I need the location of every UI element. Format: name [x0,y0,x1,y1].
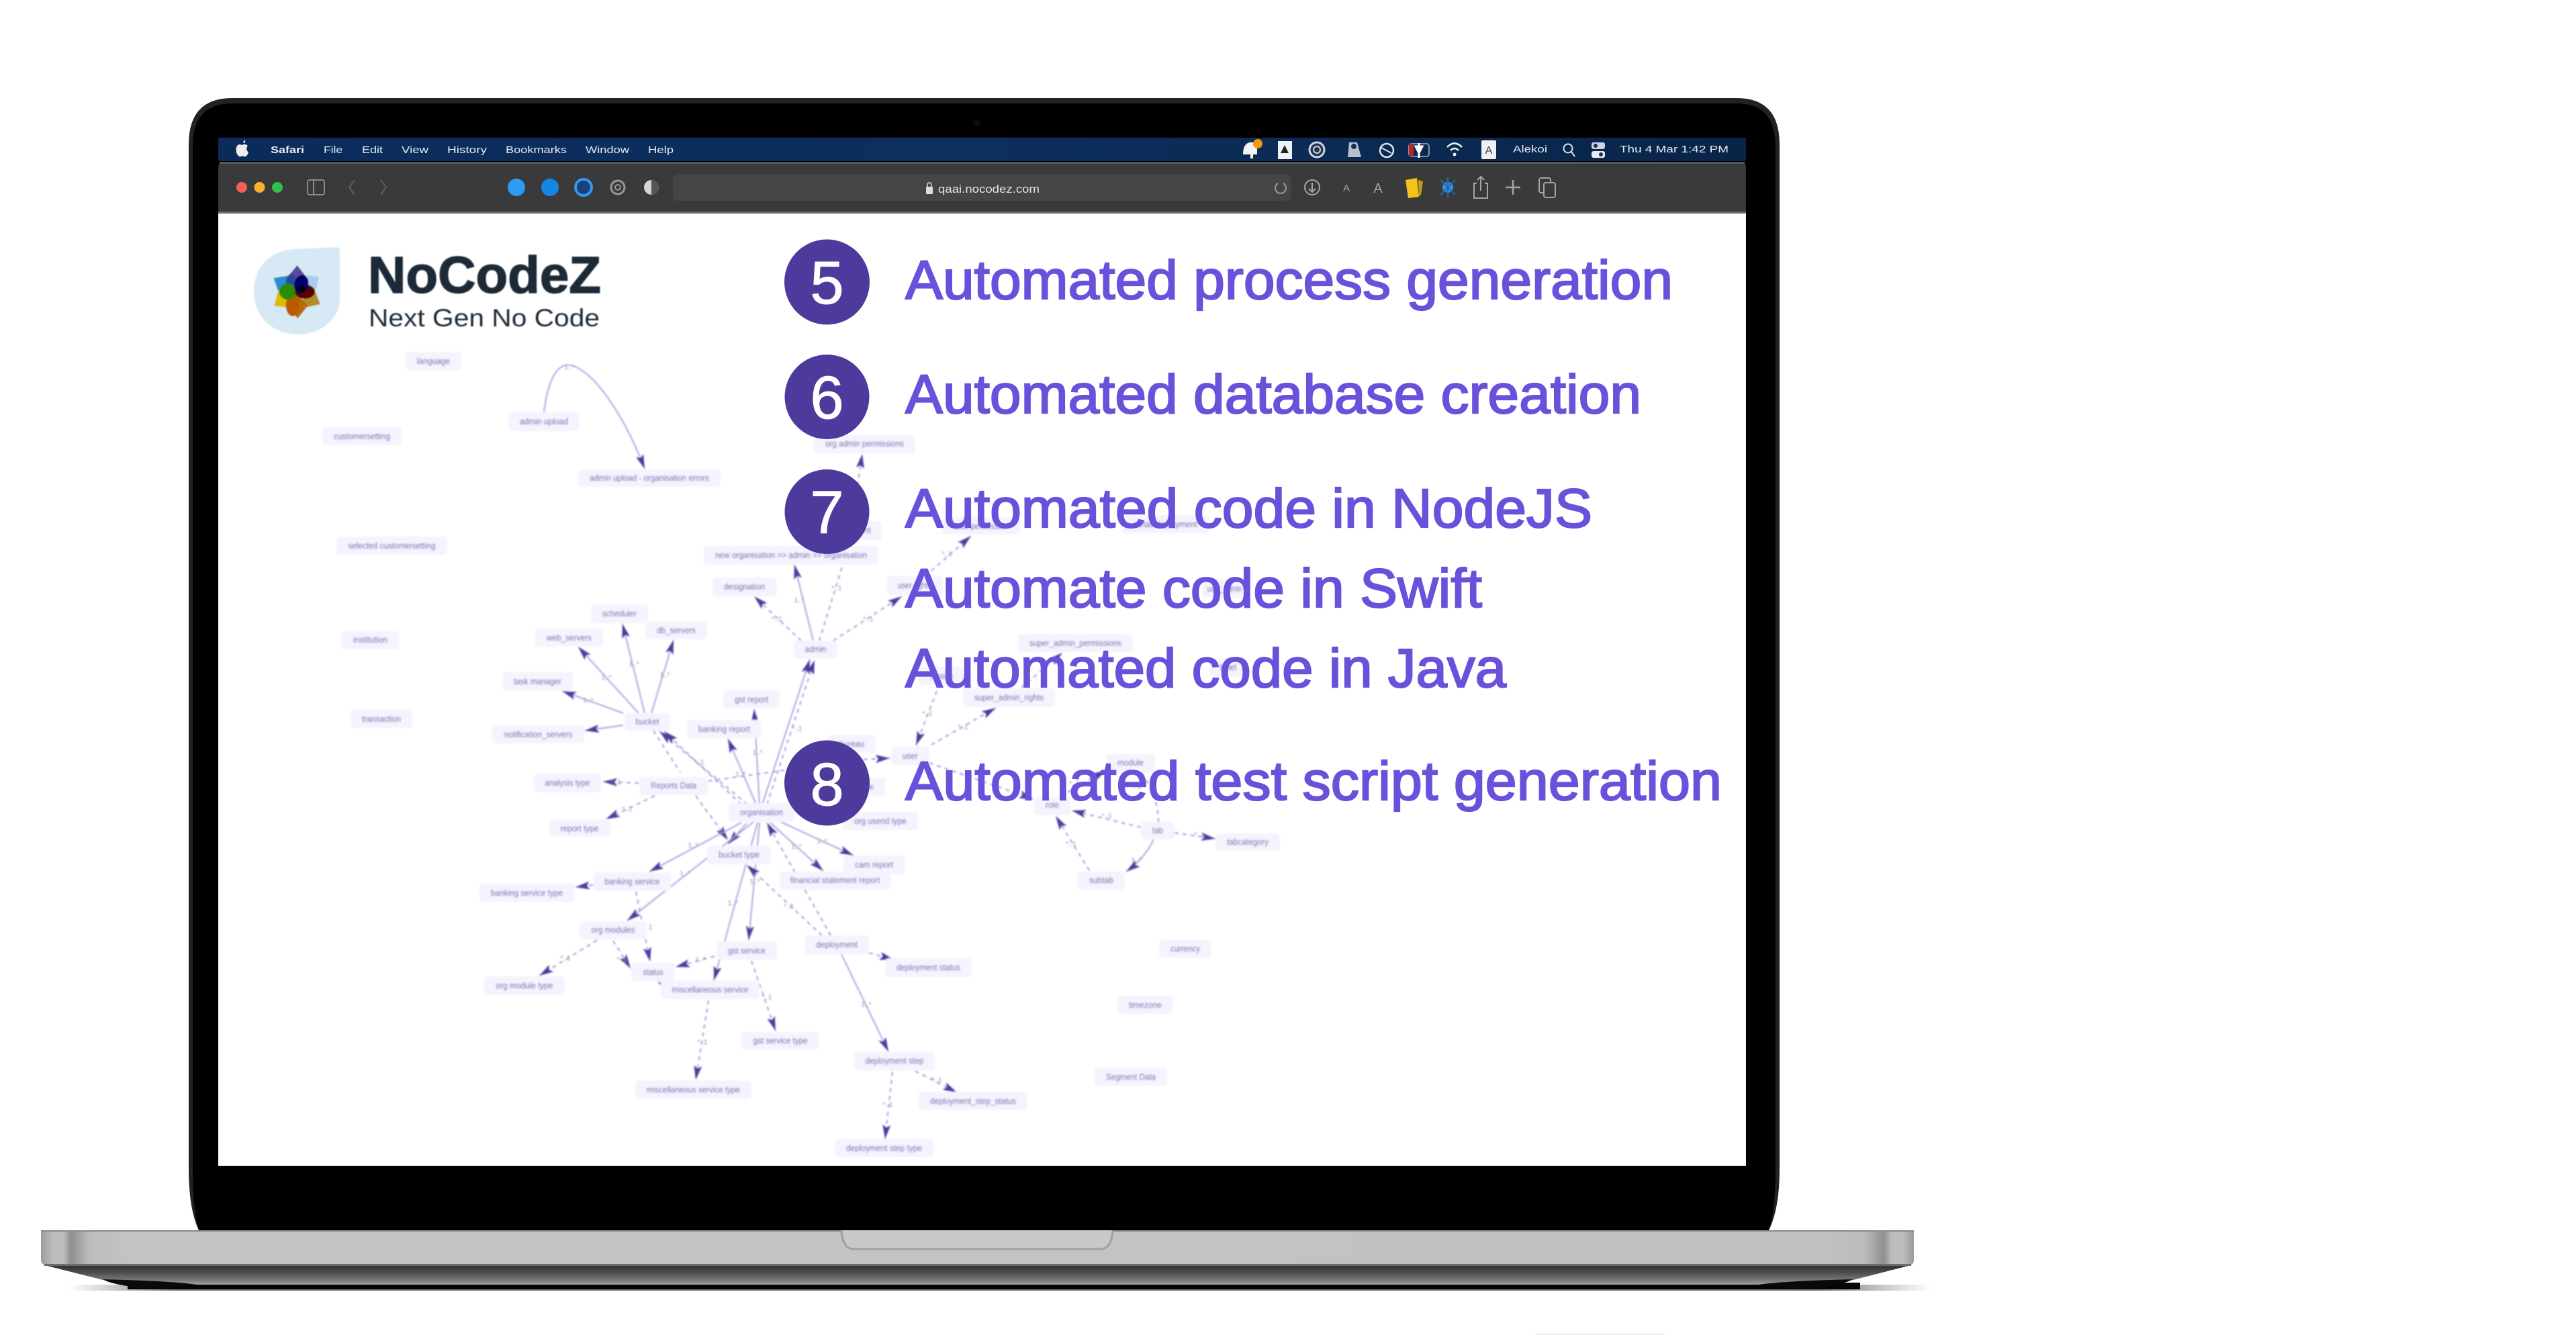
camera [974,120,980,126]
graph nodes: detail deployment [1134,519,1197,529]
menu items: View [402,144,428,156]
heading 6: Automated database creation [905,364,1641,425]
edge cardinality labels: *..1 [941,551,952,558]
graph nodes: admin upload - organisation errors [590,473,709,483]
edge cardinality labels: 1..* [629,661,639,668]
heading 5: Automated process generation [905,250,1673,311]
step 5 [784,239,1673,325]
graph nodes: gst service [728,946,766,956]
graph nodes: admin upload [520,416,568,426]
graph nodes: status [643,967,663,977]
laptop base [41,1230,1931,1335]
graph nodes: analysis type [545,778,590,788]
edge cardinality labels [560,364,1205,1109]
edge cardinality labels: *..1 [792,725,802,733]
number badge 8: 8 [810,751,844,819]
edge cardinality labels: *..1 [922,710,933,718]
status icons: A [1485,145,1493,156]
number badge 7 [784,469,869,554]
tagline: Next Gen No Code [369,304,600,332]
number badge 6 [784,355,869,439]
edge cardinality labels: 1..* [727,900,738,907]
edge cardinality labels: *..1 [622,806,633,813]
step 8 [784,740,1722,826]
graph nodes: miscellaneous service type [647,1085,740,1095]
graph nodes: super_admin_permissions [1029,638,1121,648]
right toolbar icons: A [1373,181,1383,196]
menu items: History [447,144,488,156]
laptop body [189,98,1780,1230]
edge cardinality labels: *..1 [694,759,704,766]
menu items: Edit [362,144,383,156]
edge cardinality labels: 1..* [817,838,827,845]
graph nodes: user [903,751,919,761]
graph nodes: Segment Data [1106,1072,1156,1082]
edge cardinality labels: *..1 [642,924,653,931]
graph nodes: org modules [591,925,635,935]
menu items [271,144,674,156]
underside of base [44,1265,1911,1285]
graph nodes: account [840,525,871,535]
graph nodes: org admin permissions [825,439,904,449]
graph nodes: currency [1170,943,1200,954]
graph nodes: task manager [514,676,562,686]
graph nodes: user_admin [1207,584,1242,594]
menu items: File [324,144,342,156]
edge cardinality labels: *..1 [610,779,621,786]
graph nodes: bucket type [719,849,760,860]
graph nodes: web_servers [546,633,592,643]
edge cardinality labels: *..1 [784,903,794,911]
edge cardinality labels: 1..* [861,1001,872,1009]
graph nodes: tabcategory [1227,837,1269,847]
number badge 8 [784,740,870,826]
graph nodes: transaction [362,714,401,724]
safari toolbar [218,162,1746,214]
graph nodes: role [1046,800,1059,810]
edge cardinality labels: *..1 [560,955,571,962]
graph nodes: designation [724,582,765,592]
edge cardinality labels: 1..* [601,674,612,682]
graph nodes: org module type [496,980,553,991]
graph nodes: financial statement report [790,875,880,885]
user name and clock: Thu 4 Mar 1:42 PM [1620,144,1729,155]
graph nodes: selected customersetting [348,541,435,551]
graph nodes: deployment [816,939,858,950]
graph nodes: banking report [698,724,750,734]
user name and clock [1513,144,1729,155]
graph nodes: banking service [604,876,659,886]
graph nodes: organisation [740,807,783,817]
heading: Swift: Automate code in Swift [905,558,1482,619]
graph nodes: language [417,356,450,366]
edge cardinality labels: *..1 [1066,841,1076,848]
edge cardinality labels: 1..* [659,672,670,679]
shadow under laptop [67,1283,1931,1291]
graph nodes: subtab [1089,875,1113,885]
menu items: Window [586,144,629,156]
edge cardinality labels: *..1 [616,956,627,964]
edge cardinality labels: *..1 [931,1076,942,1084]
edge cardinality labels: *..1 [1069,780,1080,788]
edge cardinality labels: *..1 [882,1101,893,1109]
edge cardinality labels: 1..* [695,956,706,964]
edge cardinality labels: *..1 [1101,813,1112,820]
graph nodes: Reports Data [651,780,697,790]
menu items: Bookmarks [506,144,567,156]
step 6 [784,355,1641,439]
icon: apple [236,140,248,156]
graph nodes: gst report [735,694,768,704]
right toolbar icons [1275,177,1555,198]
edge cardinality labels: 1..* [1131,857,1142,864]
entity relationship graph [322,352,1280,1157]
graph nodes: institution [353,635,387,645]
edge cardinality labels: 1..* [794,597,804,604]
graph nodes: label [1220,662,1236,672]
logo [254,246,601,334]
graph nodes: user permission [954,521,1009,531]
graph nodes [322,352,1280,1157]
heading 8: Automated test script generation [905,751,1722,812]
graph nodes: timezone [1129,1000,1162,1010]
menu items: Help [648,144,674,156]
graph nodes: deployment step [865,1056,924,1066]
number badge 5: 5 [810,250,844,317]
edge cardinality labels: *..1 [831,585,842,592]
graph nodes: module [1117,757,1144,768]
edge cardinality labels: 1..* [791,843,802,851]
extension icons [508,179,659,196]
sidebar and nav icons [308,180,386,195]
edge cardinality labels: *..1 [762,994,772,1001]
graph nodes: user rights [898,580,931,590]
heading 7: NodeJS: Automated code in NodeJS [905,478,1592,539]
graph nodes: deployment_step_status [930,1096,1016,1106]
edge cardinality labels: 1..* [680,870,690,878]
graph nodes: deployment step type [846,1143,922,1153]
edge cardinality labels: 1..* [748,727,759,734]
edge cardinality labels: 1..* [749,878,760,886]
graph nodes: type [860,782,874,792]
edge cardinality labels: *..1 [863,616,874,623]
graph nodes: tab [1152,825,1163,835]
graph nodes: org userid type [854,816,907,826]
mac menu bar [218,138,1746,161]
graph nodes: deployment status [896,962,960,972]
right toolbar icons: A [1343,183,1350,194]
number badge 5 [784,239,870,325]
url field [673,175,1291,201]
graph nodes: db_servers [657,625,696,635]
edge cardinality labels: 1..* [564,364,575,371]
heading: Java: Automated code in Java [905,638,1506,699]
graph nodes: miscellaneous service [672,984,748,995]
graph nodes: admin [804,644,826,654]
edge cardinality labels: 1..* [735,771,746,778]
graph nodes: notification_servers [504,729,573,739]
menu items: Safari [271,144,304,156]
graph nodes: super_admin_rights [974,692,1044,702]
edge cardinality labels: 1..* [688,842,698,849]
graph nodes: session [930,671,953,681]
edge cardinality labels: 1..* [752,749,763,757]
status icons [1243,139,1605,159]
edge cardinality labels: *..1 [1194,831,1205,839]
graph edges [539,365,1215,1139]
graph nodes: banking service type [491,888,563,898]
edge cardinality labels: *..1 [958,724,968,731]
graph nodes: cam report [855,860,893,870]
user name and clock: Alekoi [1513,144,1547,155]
graph nodes: bureau [839,739,864,749]
graph nodes: new organisation >> admin >> organisation [715,550,867,560]
graph nodes: scheduler [602,608,637,618]
brand name: NoCodeZ [368,246,601,304]
faint mark below laptop [1535,1334,1665,1335]
step 7 [784,469,1592,554]
graph nodes: bucket [635,717,659,727]
silver top deck [41,1230,1914,1265]
edge cardinality labels: *..1 [772,616,782,623]
graph nodes: report type [560,823,599,833]
icon: logo drop with star [254,247,340,334]
number badge 7: 7 [810,479,844,547]
edge cardinality labels: 1..* [583,697,594,704]
window controls [236,182,283,193]
hinge notch [841,1230,1113,1249]
screen [218,214,1746,1166]
url: qaai.nocodez.com [938,183,1040,195]
rubber feet [103,1279,1853,1289]
number badge 6: 6 [810,365,844,432]
edge cardinality labels: *..1 [1131,783,1142,790]
edge cardinality labels: *..1 [697,1039,708,1046]
graph nodes: customersetting [334,431,390,441]
graph nodes: gst service type [753,1035,807,1046]
